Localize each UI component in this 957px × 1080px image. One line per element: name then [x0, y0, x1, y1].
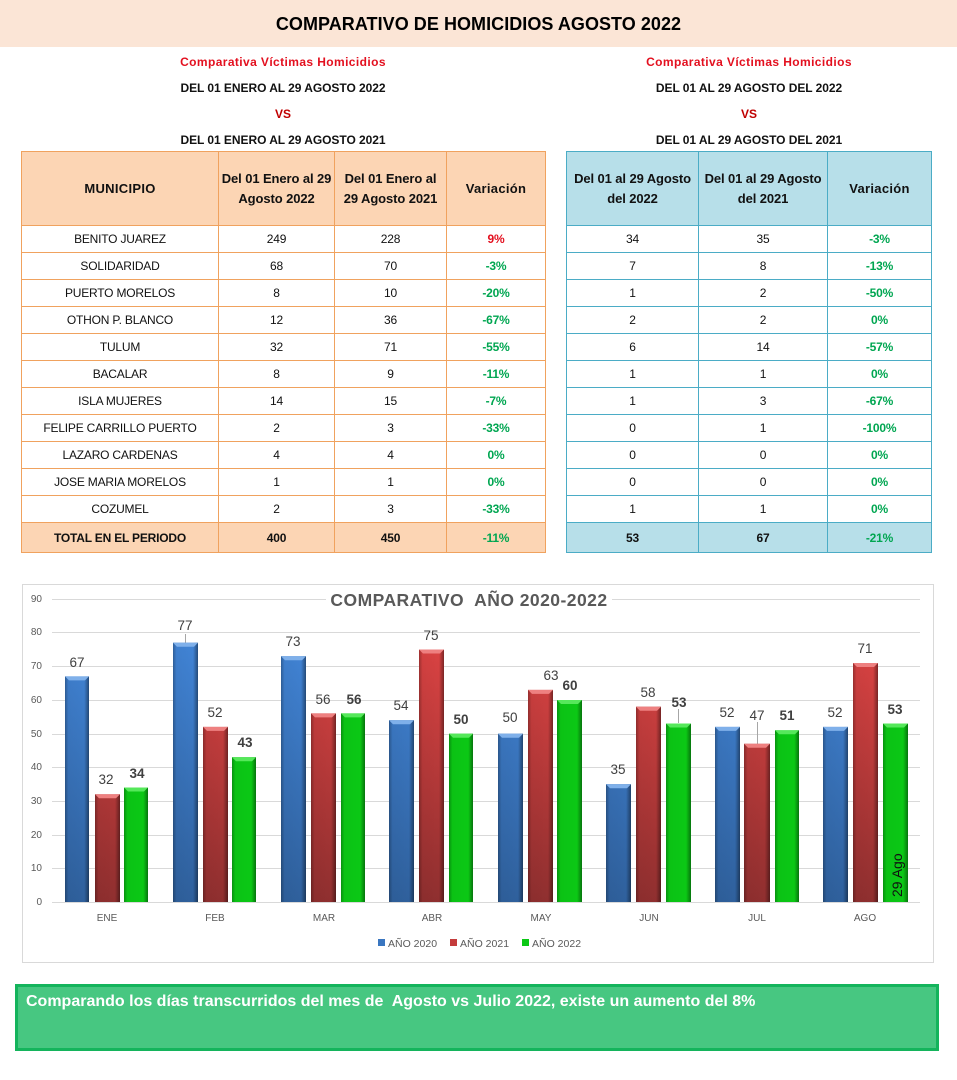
row: Solidaridad: 70 — [384, 259, 397, 273]
row: Puerto Morelos: 2 — [760, 286, 766, 300]
row: Benito Juarez: -3% — [869, 232, 890, 246]
data labels: 2022: 60 — [562, 678, 578, 693]
row: Solidaridad — [80, 259, 506, 273]
row: Tulum — [100, 340, 510, 354]
data labels: 2021: 56 — [315, 692, 331, 707]
y axis labels: 60 — [31, 695, 42, 706]
row: Isla Mujeres: -67% — [866, 394, 893, 408]
leader lines — [186, 634, 758, 744]
y axis labels — [31, 594, 42, 908]
data labels: 2020 — [69, 618, 843, 777]
row: Benito Juarez: 9% — [488, 232, 504, 246]
bars: MAR — [281, 656, 365, 902]
data labels: 2020: 52 — [827, 705, 843, 720]
row: Othon P. Blanco: -67% — [482, 313, 510, 327]
heading: left table heading — [180, 55, 386, 147]
row: Solidaridad: -13% — [866, 259, 893, 273]
row: total: TOTAL EN EL PERIODO — [54, 530, 186, 544]
y axis labels: 0 — [36, 897, 42, 908]
row: total: 450 — [381, 530, 400, 544]
row: Bacalar: BACALAR — [93, 367, 147, 381]
row: Tulum: -57% — [866, 340, 893, 354]
legend: AÑO 2022 — [532, 937, 581, 950]
row: Puerto Morelos: 8 — [273, 286, 280, 300]
x axis labels: JUL — [748, 913, 766, 924]
table header row: Variación — [466, 180, 526, 196]
row: total: -11% — [483, 530, 509, 544]
row: Cozumel: 1 — [629, 502, 636, 516]
row: Tulum: 14 — [757, 340, 769, 354]
bars: ABR — [389, 650, 473, 902]
row: Bacalar: 1 — [629, 367, 636, 381]
row: Tulum: TULUM — [100, 340, 140, 354]
row: Isla Mujeres: 1 — [629, 394, 636, 408]
row: Felipe Carrillo Puerto: -33% — [482, 421, 510, 435]
row: Cozumel — [629, 502, 888, 516]
table header row: Variación — [849, 180, 910, 196]
row: Felipe Carrillo Puerto: 1 — [760, 421, 766, 435]
row: Othon P. Blanco — [629, 313, 888, 327]
row: Benito Juarez: BENITO JUAREZ — [74, 232, 166, 246]
row: Solidaridad: 8 — [760, 259, 766, 273]
row: Puerto Morelos — [65, 286, 510, 300]
legend: AÑO 2021 — [460, 937, 509, 950]
row: Jose Maria Morelos: 0 — [629, 475, 636, 489]
heading: left table heading: DEL 01 ENERO AL 29 AGOSTO 2021 — [180, 133, 386, 147]
row: Jose Maria Morelos: 0% — [488, 475, 504, 489]
row: Isla Mujeres: ISLA MUJERES — [78, 394, 162, 408]
chart frame — [22, 584, 934, 962]
x axis labels: AGO — [854, 913, 876, 924]
row: Puerto Morelos: 1 — [629, 286, 636, 300]
row: Othon P. Blanco: 0% — [871, 313, 888, 327]
bars: FEB — [173, 643, 256, 902]
data labels: 2020: 54 — [393, 698, 409, 713]
callout: Comparando los días transcurridos del mes de Agosto vs Julio 2022, existe un aumento del 8% — [26, 993, 755, 1010]
row: Othon P. Blanco — [67, 313, 510, 327]
x axis labels: MAR — [313, 913, 335, 924]
row: Bacalar: -11% — [483, 367, 509, 381]
data labels: 2021: 52 — [207, 705, 223, 720]
bars: ENE — [65, 676, 148, 902]
row: Lazaro Cardenas: 0% — [871, 448, 888, 462]
data labels: 2022: 43 — [237, 735, 253, 750]
heading: right table heading — [646, 55, 852, 147]
row: Puerto Morelos: -20% — [482, 286, 510, 300]
row: Jose Maria Morelos — [629, 475, 888, 489]
table header row: Del 01 al 29 Agosto — [705, 170, 821, 186]
data labels: 2021: 58 — [640, 685, 656, 700]
row: Lazaro Cardenas: LAZARO CARDENAS — [62, 448, 178, 462]
row: total: 400 — [267, 530, 286, 544]
row: Felipe Carrillo Puerto: 3 — [387, 421, 394, 435]
heading: right table heading: Comparativa Víctimas Homicidios — [646, 55, 852, 69]
title — [0, 0, 957, 47]
row: Cozumel: COZUMEL — [91, 502, 149, 516]
bars: JUN — [606, 707, 691, 902]
y axis labels: 90 — [31, 594, 42, 605]
table header row: Agosto 2022 — [238, 190, 315, 206]
title: COMPARATIVO DE HOMICIDIOS AGOSTO 2022 — [276, 14, 681, 34]
row: Benito Juarez — [626, 232, 890, 246]
row: Felipe Carrillo Puerto: -100% — [863, 421, 896, 435]
table header row: del 2021 — [738, 190, 788, 206]
data labels: 2022: 53 — [887, 702, 903, 717]
row: Felipe Carrillo Puerto: 2 — [273, 421, 280, 435]
row: Bacalar: 8 — [273, 367, 280, 381]
row: Isla Mujeres — [78, 394, 506, 408]
y axis labels: 20 — [31, 830, 42, 841]
row: Lazaro Cardenas: 4 — [387, 448, 394, 462]
row: Solidaridad: SOLIDARIDAD — [80, 259, 160, 273]
table header row: Del 01 Enero al 29 — [222, 170, 331, 186]
data labels: 2021: 71 — [857, 641, 873, 656]
row: Cozumel: 2 — [273, 502, 280, 516]
row: Jose Maria Morelos: 0% — [871, 475, 888, 489]
x axis labels: MAY — [531, 913, 552, 924]
data labels: 2020: 52 — [719, 705, 735, 720]
row: Lazaro Cardenas: 0 — [760, 448, 766, 462]
row: total — [22, 523, 545, 552]
row: Bacalar: 9 — [387, 367, 394, 381]
row: Tulum: 6 — [629, 340, 636, 354]
legend: AÑO 2020 — [388, 937, 437, 950]
y axis labels: 50 — [31, 729, 42, 740]
heading: right table heading: DEL 01 AL 29 AGOSTO DEL 2021 — [656, 133, 842, 147]
bars: MAY — [498, 690, 582, 902]
row: Benito Juarez: 249 — [267, 232, 286, 246]
table header row: MUNICIPIO — [84, 180, 156, 196]
row: Jose Maria Morelos: JOSE MARIA MORELOS — [54, 475, 186, 489]
row: Bacalar — [629, 367, 888, 381]
row: Othon P. Blanco: OTHON P. BLANCO — [67, 313, 173, 327]
row: Benito Juarez — [74, 232, 504, 246]
row: Jose Maria Morelos: 1 — [387, 475, 394, 489]
data labels: 2020: 35 — [610, 762, 626, 777]
table header row: del 2022 — [607, 190, 658, 206]
data labels: 2022: 56 — [346, 692, 362, 707]
heading: right table heading: DEL 01 AL 29 AGOSTO DEL 2022 — [656, 81, 842, 95]
row: Cozumel: -33% — [482, 502, 510, 516]
data labels: 2020: 77 — [177, 618, 193, 633]
row: Jose Maria Morelos: 1 — [273, 475, 280, 489]
data labels: 2021 — [98, 628, 873, 787]
annotation: 29 Ago: 29 Ago — [889, 853, 905, 897]
row: Jose Maria Morelos: 0 — [760, 475, 766, 489]
table header row — [567, 152, 931, 552]
row: Puerto Morelos — [629, 286, 893, 300]
row: total: 67 — [757, 530, 769, 544]
data labels: 2022 — [129, 678, 903, 781]
row: Puerto Morelos: 10 — [384, 286, 397, 300]
table header row: Del 01 al 29 Agosto — [574, 170, 691, 186]
y axis labels: 40 — [31, 762, 42, 773]
row: Benito Juarez: 34 — [626, 232, 639, 246]
row: Lazaro Cardenas — [62, 448, 504, 462]
row: Puerto Morelos: PUERTO MORELOS — [65, 286, 175, 300]
x axis labels: JUN — [639, 913, 659, 924]
callout — [15, 984, 939, 1051]
row: Isla Mujeres: 3 — [760, 394, 766, 408]
y axis labels: 80 — [31, 627, 42, 638]
row: Puerto Morelos: -50% — [866, 286, 893, 300]
row: Isla Mujeres — [629, 394, 893, 408]
row: Bacalar: 0% — [871, 367, 888, 381]
row: Bacalar: 1 — [760, 367, 766, 381]
row: Isla Mujeres: 15 — [384, 394, 397, 408]
row: Benito Juarez: 228 — [381, 232, 400, 246]
heading: left table heading: Comparativa Víctimas Homicidios — [180, 55, 386, 69]
row: Felipe Carrillo Puerto — [43, 421, 510, 435]
row: Cozumel — [91, 502, 510, 516]
y axis labels: 10 — [31, 863, 42, 874]
y axis labels: 30 — [31, 796, 42, 807]
row: Solidaridad: -3% — [486, 259, 506, 273]
row: Solidaridad: 68 — [270, 259, 283, 273]
data labels: 2020: 67 — [69, 655, 85, 670]
row: total: -21% — [866, 530, 893, 544]
row: Lazaro Cardenas: 0% — [488, 448, 504, 462]
row: Isla Mujeres: 14 — [270, 394, 283, 408]
row: Tulum: -55% — [482, 340, 510, 354]
bars: AGO — [823, 663, 908, 902]
row: Othon P. Blanco: 36 — [384, 313, 397, 327]
data labels: 2020: 50 — [502, 710, 518, 725]
data labels: 2021: 47 — [749, 708, 765, 723]
row: Felipe Carrillo Puerto — [629, 421, 896, 435]
row: Tulum — [629, 340, 893, 354]
chart title: COMPARATIVO AÑO 2020-2022 — [330, 589, 608, 610]
table: municipios year to date — [21, 151, 546, 553]
row: Lazaro Cardenas — [629, 448, 888, 462]
row: Solidaridad: 7 — [629, 259, 636, 273]
row: Cozumel: 0% — [871, 502, 888, 516]
table: August month comparison — [566, 151, 932, 553]
row: total — [567, 523, 931, 552]
x axis labels — [97, 913, 876, 924]
table header row — [22, 152, 545, 552]
row: Othon P. Blanco: 2 — [629, 313, 636, 327]
row: Othon P. Blanco: 12 — [270, 313, 283, 327]
row: Cozumel: 1 — [760, 502, 766, 516]
row: Jose Maria Morelos — [54, 475, 504, 489]
data labels: 2022: 51 — [779, 708, 795, 723]
row: Felipe Carrillo Puerto: FELIPE CARRILLO PUERTO — [43, 421, 197, 435]
gridlines — [52, 600, 920, 902]
y axis labels: 70 — [31, 661, 42, 672]
row: Felipe Carrillo Puerto: 0 — [629, 421, 636, 435]
row: Lazaro Cardenas: 4 — [273, 448, 280, 462]
row: Solidaridad — [629, 259, 893, 273]
row: Tulum: 32 — [270, 340, 283, 354]
row: Cozumel: 3 — [387, 502, 394, 516]
row: Lazaro Cardenas: 0 — [629, 448, 636, 462]
row: Isla Mujeres: -7% — [486, 394, 506, 408]
row: Benito Juarez: 35 — [757, 232, 769, 246]
data labels: 2020: 73 — [285, 634, 301, 649]
heading: right table heading: VS — [741, 107, 757, 121]
x axis labels: ENE — [97, 913, 118, 924]
heading: left table heading: DEL 01 ENERO AL 29 AGOSTO 2022 — [180, 81, 386, 95]
legend — [378, 937, 581, 950]
heading: left table heading: VS — [275, 107, 291, 121]
x axis labels: FEB — [205, 913, 225, 924]
data labels: 2021: 32 — [98, 772, 114, 787]
row: Othon P. Blanco: 2 — [760, 313, 766, 327]
table header row: 29 Agosto 2021 — [344, 190, 437, 206]
data labels: 2022: 50 — [453, 712, 469, 727]
row: total: 53 — [626, 530, 639, 544]
data labels: 2021: 63 — [543, 668, 559, 683]
bars: JUL — [715, 727, 799, 902]
data labels: 2021: 75 — [423, 628, 439, 643]
data labels: 2022: 34 — [129, 766, 145, 781]
row: Tulum: 71 — [384, 340, 397, 354]
table header row: Del 01 Enero al — [345, 170, 436, 186]
row: Bacalar — [93, 367, 510, 381]
x axis labels: ABR — [422, 913, 442, 924]
data labels: 2022: 53 — [671, 695, 687, 710]
